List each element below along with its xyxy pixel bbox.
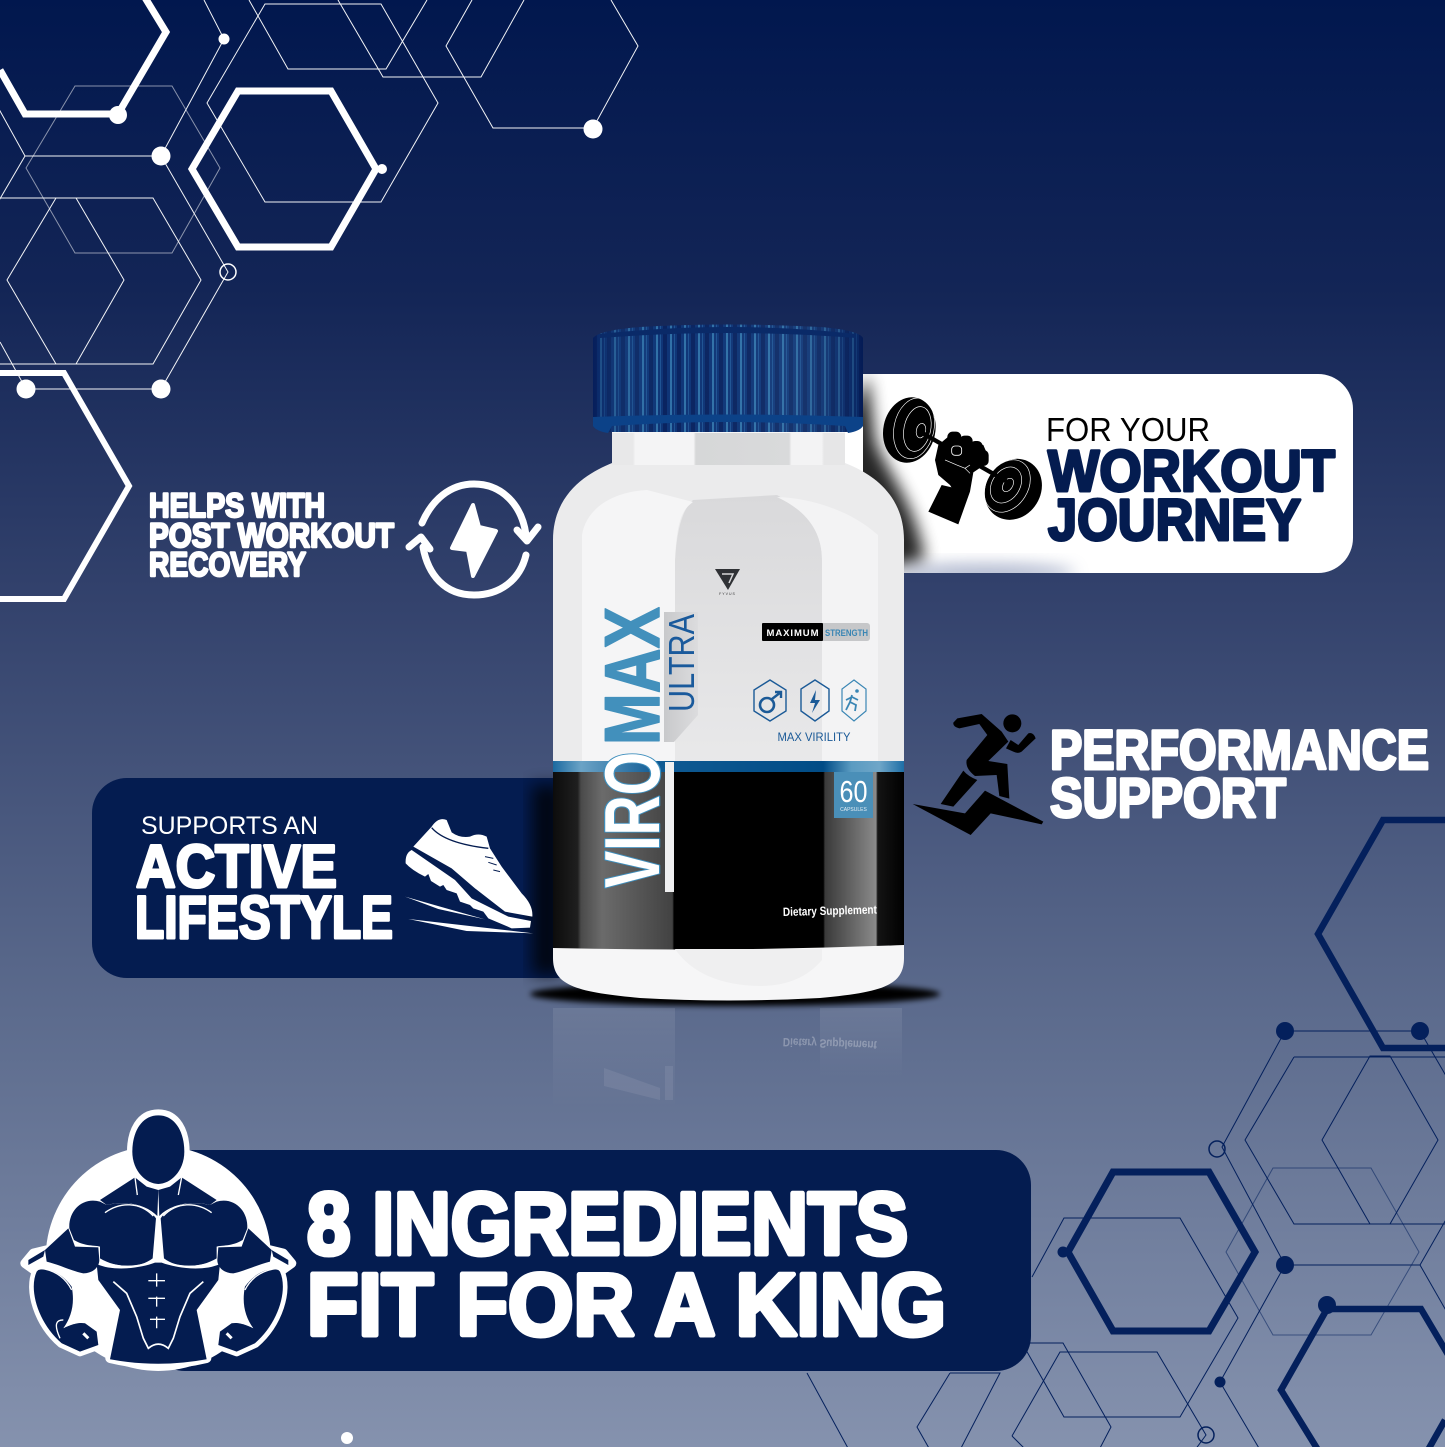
icon: male symbol hexagon [754,680,786,721]
bottle reflection [553,1008,902,1108]
heading: active: ACTIVE [136,833,337,900]
label: max virility: MAX VIRILITY [778,732,851,744]
small white dot [341,1432,353,1444]
right highlight strip [778,497,822,555]
label: dietary supplement: Dietary Supplement [783,903,877,919]
heading: journey: JOURNEY [1048,488,1301,553]
blue band [553,761,904,772]
icon: runner hexagon [842,680,866,721]
badge: maximum strength: STRENGTH [825,628,868,639]
heading: lifestyle: LIFESTYLE [135,884,393,951]
text: helps with post workout recovery: RECOVERY [149,546,306,584]
logo mark: FYVUS [719,592,736,596]
bottle shadow on white panel [863,374,1077,573]
bottle reflection: Dietary Supplement [783,1035,877,1052]
icon: runner [913,714,1043,835]
centre label panel [675,495,822,666]
label: for your: FOR YOUR [1046,411,1210,448]
black label [553,770,904,950]
shadow beside bottle on panel [532,785,562,975]
bottle white body [553,463,904,761]
brand name: ultra: ULTRA [661,614,702,712]
vertical white bar [665,762,674,892]
text: performance support [1050,718,1429,829]
badge: maximum strength [762,623,870,641]
text: performance support: SUPPORT [1050,766,1286,829]
neck shading [635,433,790,465]
icon: dumbbell in fist [877,392,1053,531]
text: helps with post workout recovery: HELPS WITH [149,487,325,525]
brand name: viro: VIRO [588,752,676,888]
bottle ground shadow [530,982,940,1006]
panel: workout journey [845,374,1353,573]
icon: bolt hexagon [801,680,829,721]
panel: active lifestyle [92,778,592,978]
text: helps with post workout recovery [149,487,394,584]
bottle white base [553,945,904,1005]
cap [593,324,863,433]
badge: 60 capsules [834,772,873,818]
badge: maximum strength: MAXIMUM [766,628,819,639]
left highlight strip [582,490,693,770]
heading: 8 ingredients: 8 INGREDIENTS [307,1174,908,1273]
heading: workout: WORKOUT [1048,439,1335,504]
ultra label shade [664,612,698,742]
brand name: max: MAX [588,607,676,745]
product bottle [553,324,904,1005]
icon: bodybuilder [25,1114,292,1371]
banner: 8 ingredients fit for a king [25,1114,1031,1371]
icon: recovery arrows with bolt [409,484,538,595]
icon: running shoe [405,819,533,933]
label: supports an: SUPPORTS AN [141,812,318,840]
hexagon network: top left [0,0,638,599]
text: helps with post workout recovery: POST WORKOUT [149,517,394,555]
heading: fit for a king: FIT FOR A KING [307,1255,946,1354]
logo mark [715,569,740,596]
hexagon network: bottom right [807,820,1445,1447]
badge: 60 capsules: 60 [840,774,868,809]
badge: 60 capsules: CAPSULES [840,807,867,813]
